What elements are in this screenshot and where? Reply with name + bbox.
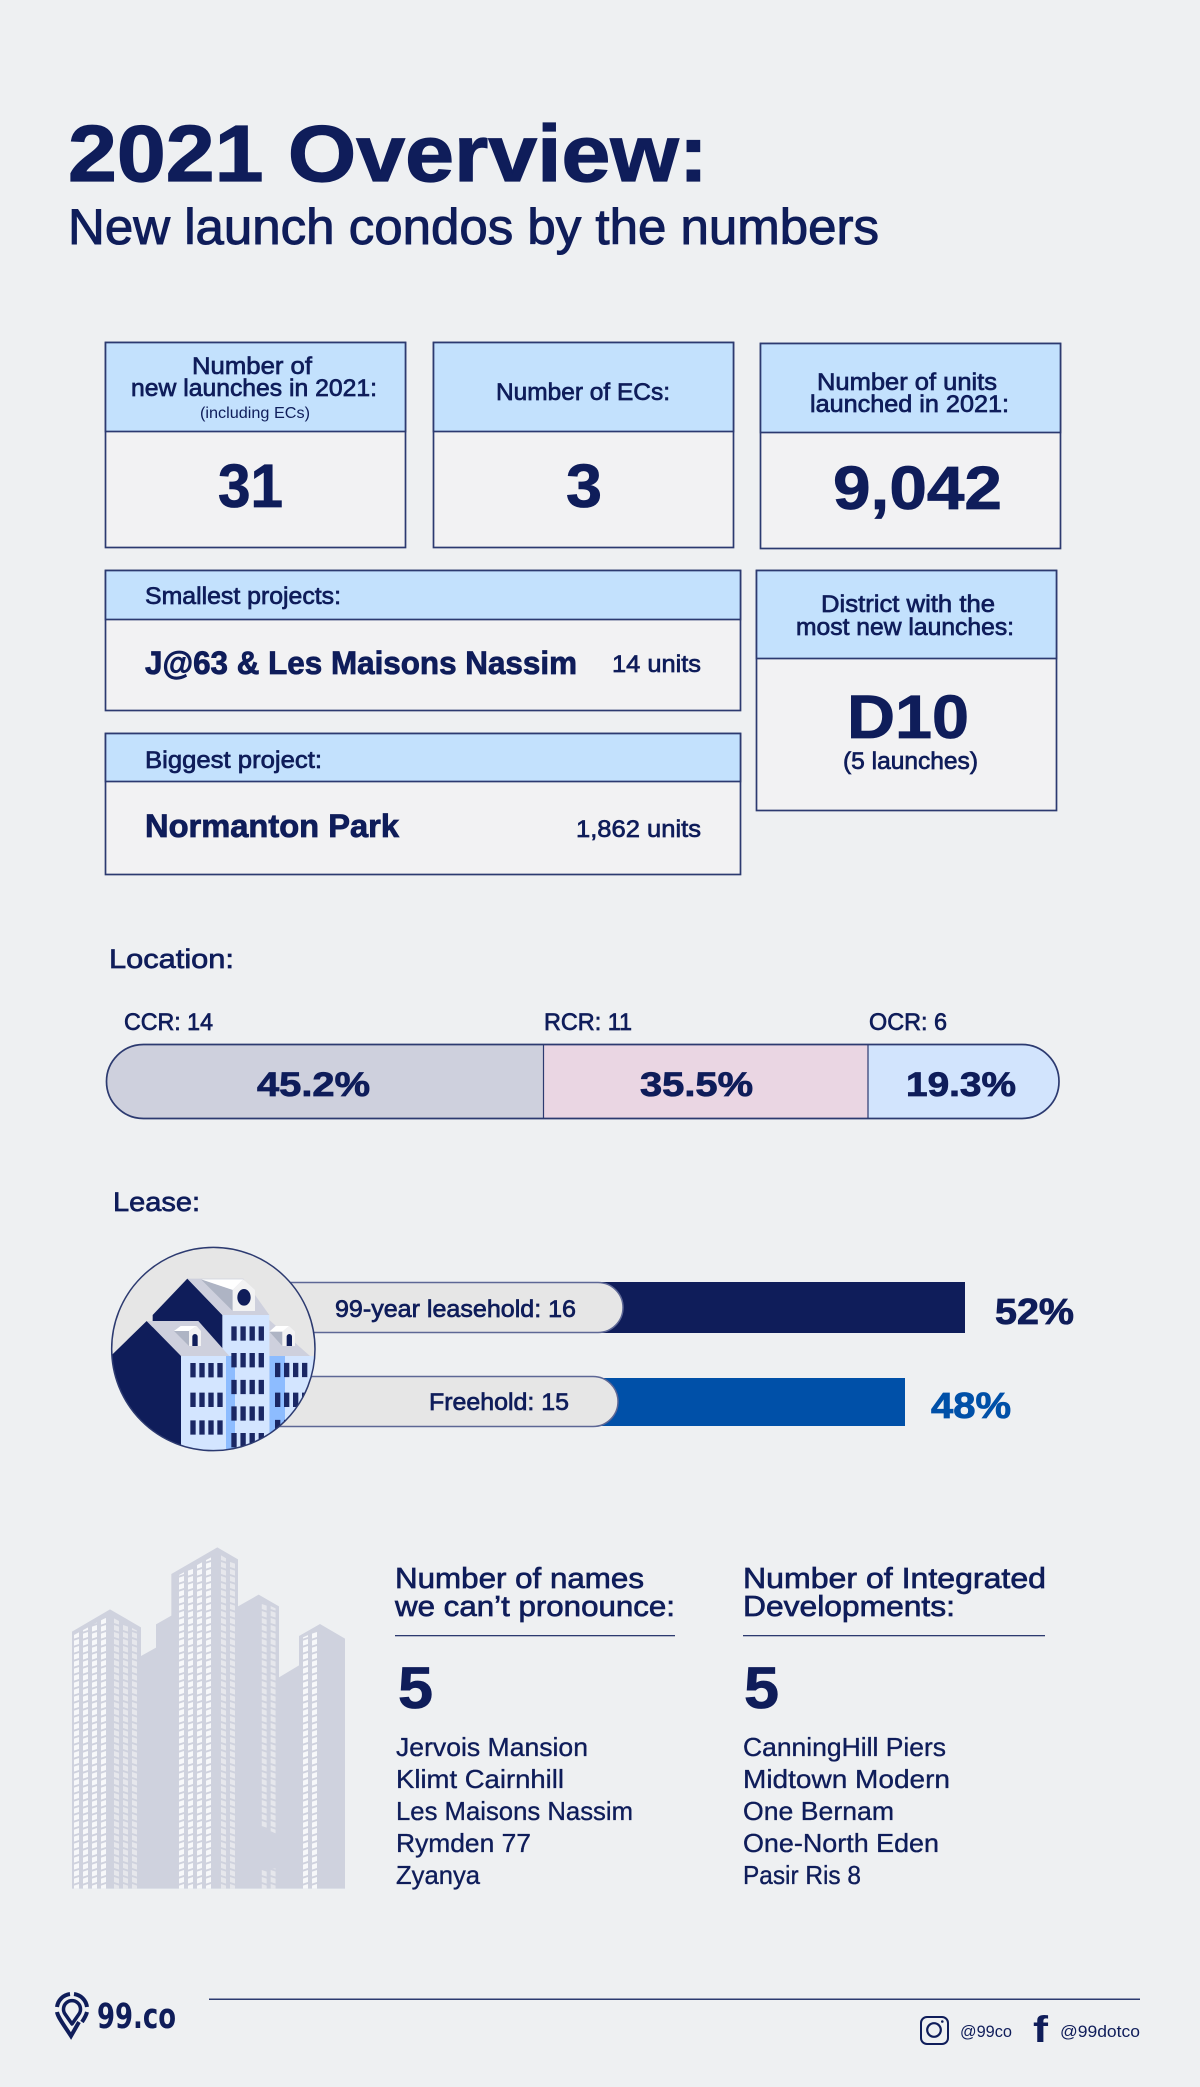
panel: number of ECs: Number of ECs: [496,379,670,406]
panel: biggest project [106,734,740,874]
panel: biggest project: Normanton Park [145,808,399,844]
panel: number of ECs [434,342,734,548]
panel: number of units: launched in 2021: [810,391,1009,418]
chart: location stacked bar [106,1009,1059,1118]
panel: biggest project: 1,862 units [576,816,701,843]
logo: 99.co: 99.co [97,1997,176,2037]
chart: location stacked bar: RCR: 11 [544,1009,632,1036]
text block: names we can't pronounce [394,1563,675,1890]
chart: location stacked bar: CCR: 14 [124,1009,213,1036]
icon: apartment buildings in a circle [107,1247,315,1453]
panel: district with most launches: most new launches: [796,614,1014,641]
text block: names we can't pronounce: Klimt Cairnhill [396,1764,564,1794]
text block: names we can't pronounce: we can’t pronounce: [394,1591,675,1623]
text block: integrated developments: Pasir Ris 8 [743,1860,861,1890]
heading: location: Location: [109,944,234,974]
panel: number of units: 9,042 [833,454,1002,522]
panel: number of new launches: (including ECs) [200,405,310,422]
panel: district with most launches: (5 launches) [843,748,978,775]
social: facebook [1033,2009,1140,2050]
text block: names we can't pronounce: Zyanya [396,1860,481,1890]
chart: 99-year leasehold bar: 52% [995,1291,1074,1332]
panel: smallest projects: J@63 & Les Maisons Nassim [145,645,577,681]
chart: location stacked bar: 45.2% [257,1066,370,1104]
social: facebook: f [1033,2009,1049,2050]
text block: names we can't pronounce: Number of names [395,1563,644,1595]
illustration: grey city skyline [72,1547,345,1889]
text block: integrated developments [743,1563,1046,1890]
social: instagram [921,2017,1012,2044]
panel: number of units [760,344,1060,548]
chart: freehold bar [200,1376,1011,1426]
social: facebook: @99dotco [1060,2022,1140,2041]
chart: 99-year leasehold bar [200,1282,1074,1333]
panel: smallest projects [106,570,740,710]
panel: number of new launches: Number of [192,353,312,380]
chart: location stacked bar: 19.3% [906,1066,1016,1104]
text block: integrated developments: One Bernam [743,1796,894,1826]
text block: integrated developments: One-North Eden [743,1828,939,1858]
chart: freehold bar: Freehold: 15 [429,1389,569,1416]
text block: names we can't pronounce: Jervois Mansion [396,1732,588,1762]
title: 2021 Overview: [68,109,708,198]
chart: freehold bar: 48% [931,1385,1011,1426]
panel: smallest projects: 14 units [612,651,701,678]
text block: names we can't pronounce: Rymden 77 [396,1828,531,1858]
logo: 99.co [57,1994,176,2037]
text block: integrated developments: CanningHill Piers [743,1732,946,1762]
text block: integrated developments: Midtown Modern [743,1764,950,1794]
panel: smallest projects: Smallest projects: [145,583,341,610]
panel: district with most launches: D10 [847,683,969,751]
panel: biggest project: Biggest project: [145,747,322,774]
chart: 99-year leasehold bar: 99-year leasehold: 16 [335,1296,576,1323]
chart: location stacked bar: 35.5% [640,1066,753,1104]
panel: number of ECs: 3 [566,452,602,520]
panel: number of new launches: new launches in 2021: [131,375,377,402]
panel: district with most launches: District with the [821,591,995,618]
chart: location stacked bar: OCR: 6 [869,1009,947,1036]
title [68,109,879,255]
panel: number of units: Number of units [817,369,997,396]
panel: district with most launches [756,570,1056,810]
title: New launch condos by the numbers [68,199,879,255]
text block: integrated developments: Number of Integrated [743,1563,1046,1595]
panel: number of new launches: 31 [218,452,283,520]
panel: number of new launches [106,342,406,548]
text block: integrated developments: Developments: [743,1591,955,1623]
heading: lease: Lease: [113,1187,200,1217]
text block: integrated developments: 5 [744,1656,779,1721]
text block: names we can't pronounce: Les Maisons Nassim [396,1796,633,1826]
social: instagram: @99co [960,2022,1012,2041]
text block: names we can't pronounce: 5 [398,1656,433,1721]
